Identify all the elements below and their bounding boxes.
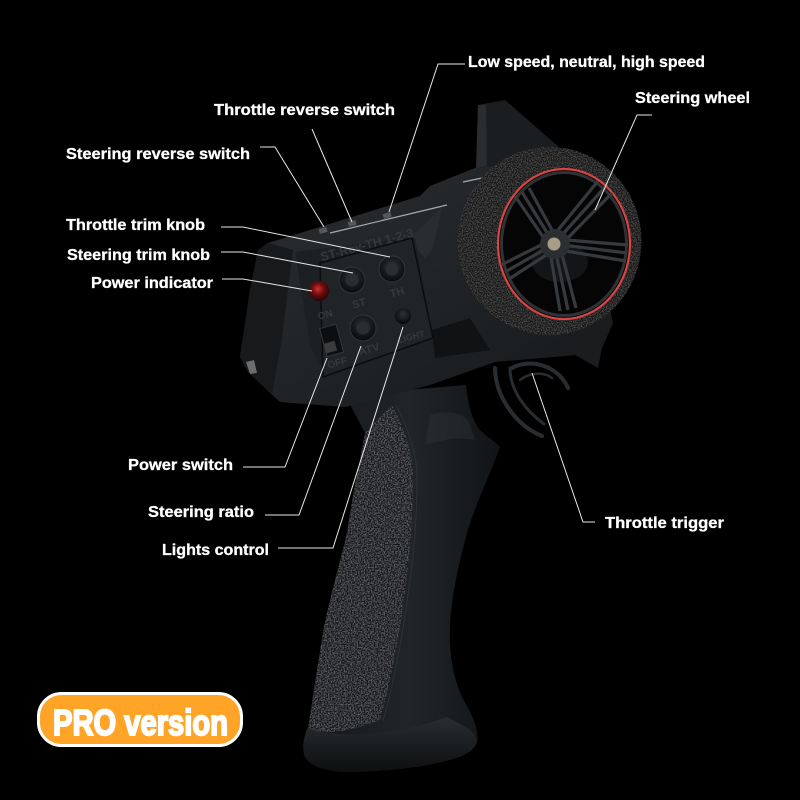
head body xyxy=(240,160,613,407)
label: steering trim knob: Steering trim knob xyxy=(67,247,210,264)
steering ratio knob xyxy=(350,315,376,341)
controller illustration: ATV xyxy=(357,341,382,359)
controller illustration: ST xyxy=(351,296,368,312)
label: power indicator: Power indicator xyxy=(91,275,213,292)
controller illustration xyxy=(240,100,642,772)
label: steering ratio: Steering ratio xyxy=(148,504,254,521)
label: steering wheel: Steering wheel xyxy=(635,90,750,107)
label: low speed: Low speed, neutral, high speed xyxy=(468,54,705,71)
leader lines xyxy=(221,64,652,548)
steering trim knob xyxy=(339,267,365,293)
throttle trigger xyxy=(495,364,568,436)
foam tyre xyxy=(458,147,642,335)
label: power switch: Power switch xyxy=(128,457,233,474)
steering wheel xyxy=(458,147,642,335)
grip base highlight xyxy=(303,717,477,772)
power LED xyxy=(309,281,329,301)
throttle trim knob xyxy=(379,256,405,282)
badge: PRO version xyxy=(38,694,242,746)
label: throttle trigger: Throttle trigger xyxy=(605,515,724,532)
badge: PRO version: PRO version xyxy=(53,702,228,743)
label: steering reverse switch: Steering reverse switch xyxy=(66,146,250,163)
controller illustration: LIGHT xyxy=(397,329,426,345)
top highlight xyxy=(330,178,482,233)
label: lights control: Lights control xyxy=(162,542,269,559)
controller illustration: ON xyxy=(317,308,334,323)
lights button xyxy=(395,308,411,324)
top switches xyxy=(319,212,392,234)
faceplate xyxy=(295,238,433,378)
red rim ring xyxy=(498,169,630,319)
spokes xyxy=(501,181,628,311)
hub and screw xyxy=(540,229,570,259)
grip xyxy=(303,385,500,772)
label: throttle reverse switch: Throttle reverse switch xyxy=(214,102,395,119)
grip texture panel xyxy=(308,405,413,732)
label: throttle trim knob: Throttle trim knob xyxy=(66,217,205,234)
controller illustration: OFF xyxy=(326,356,348,371)
controller illustration: TH xyxy=(389,285,406,301)
rim interior xyxy=(497,168,631,320)
rear fin xyxy=(476,100,590,180)
embossed switch legend: ST-Rev-TH 1-2-3 xyxy=(319,226,415,264)
power slide switch xyxy=(320,324,344,357)
wedge near wheel xyxy=(408,206,443,258)
